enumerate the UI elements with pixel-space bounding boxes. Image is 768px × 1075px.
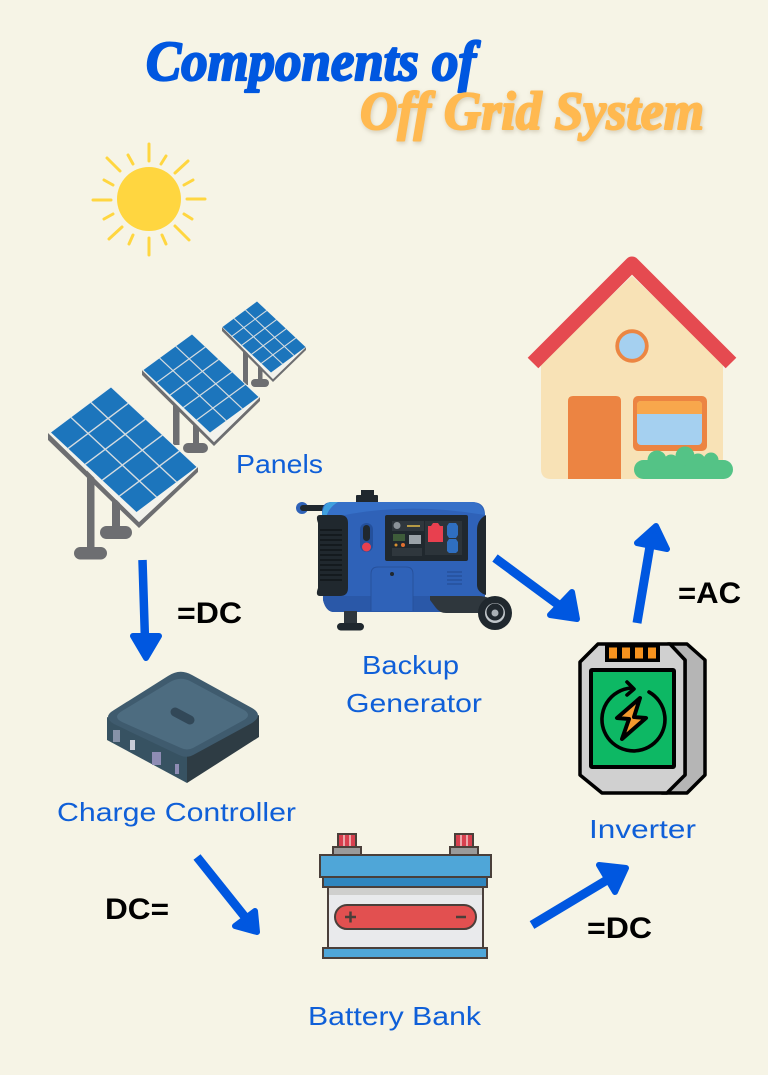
icon: house [533,264,733,479]
plus and minus [345,912,466,922]
battery base [323,948,487,958]
icon: backup generator [296,490,512,630]
house roof [533,264,731,363]
controller ports [113,730,179,774]
label: charge controller: Charge Controller [57,797,296,827]
arrow: panels to controller [133,560,159,658]
label: =AC: =AC [678,577,741,610]
label: backup generator: Backup [362,650,459,680]
wheel [478,596,512,630]
bush [634,446,733,479]
vents [447,572,462,584]
arrow: controller to battery [197,857,257,932]
generator handle [296,502,325,514]
label: =DC top: =DC [177,597,242,630]
left grip [317,515,348,596]
icon: solar panels [48,301,306,560]
generator foot [337,611,364,630]
inverter back [662,644,705,793]
controller right face [187,715,259,783]
icon: inverter [580,644,705,793]
icon: sun [93,144,205,255]
door [371,567,413,611]
icon: battery [320,834,491,958]
inverter screen [591,670,674,767]
controller slot [175,712,190,720]
label: inverter: Inverter [589,814,696,844]
small solar panel [222,301,306,387]
right terminal [450,834,478,855]
label: backup generator: Generator [346,688,482,718]
controller top inner [117,679,248,750]
left terminal [333,834,361,855]
title [146,31,704,141]
bolt [617,698,646,739]
window [633,396,707,451]
battery lid [323,877,487,887]
label: battery bank: Battery Bank [308,1001,482,1031]
generator body [322,502,485,612]
cycle arrow [602,682,665,751]
arrow: inverter to house [637,526,667,623]
label: backup generator [346,650,482,718]
label: DC=: DC= [105,893,169,926]
door [568,396,621,479]
red label [335,905,476,929]
house wall [541,276,723,479]
arrow: generator to inverter [495,558,577,619]
inverter tab [605,644,660,662]
controller left face [107,717,187,783]
controller top [108,672,258,757]
control panel [385,515,468,561]
generator cap [356,490,378,503]
medium solar panel [142,334,260,453]
label: panels: Panels [236,449,323,479]
wheel arm [430,596,497,613]
start switch [360,523,373,552]
battery body [328,887,483,949]
inverter front [580,644,685,793]
icon: charge controller [107,672,259,783]
round window [617,331,647,361]
title line 2: Off Grid System [360,81,704,141]
large solar panel [48,386,198,560]
arrow: battery to inverter [532,865,626,925]
label: =DC bottom: =DC [587,912,652,945]
title line 1: Components of [146,31,481,93]
right grip [477,515,486,595]
